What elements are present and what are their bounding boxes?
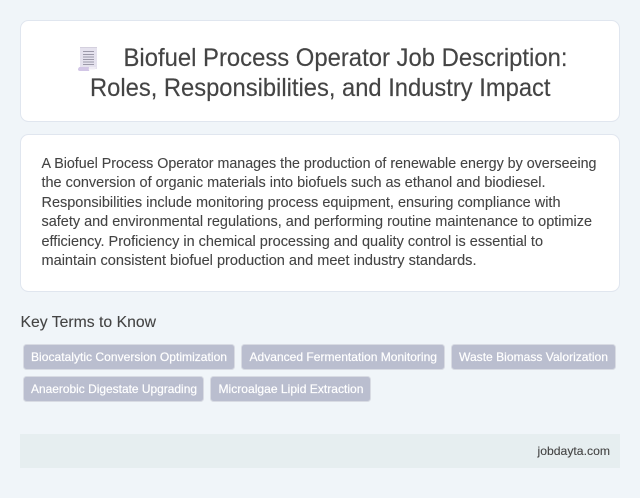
chip: waste biomass valorization [452,344,616,370]
icon: paper scroll [78,47,97,71]
chip: advanced fermentation monitoring: Advanced Fermentation Monitoring [250,350,437,364]
panel: description card [20,134,620,292]
footer: site name: jobdayta.com [536,444,610,458]
text block: description: Responsibilities include monitoring process equipment, ensuring compliance with [42,195,560,211]
text block: description: the conversion of organic materials into biofuels such as ethanol and biodiesel. [42,175,546,191]
text block: description [42,156,596,269]
chip: anaerobic digestate upgrading: Anaerobic Digestate Upgrading [31,382,197,396]
panel: title card [20,20,620,122]
heading: title: Biofuel Process Operator Job Description: [124,44,568,72]
footer bar [20,434,620,468]
chip: anaerobic digestate upgrading [24,376,204,402]
heading: key terms: Key Terms to Know [20,314,156,331]
heading: title: Roles, Responsibilities, and Industry Impact [90,74,551,102]
chip: biocatalytic conversion optimization: Biocatalytic Conversion Optimization [31,350,227,364]
chip: microalgae lipid extraction: Microalgae Lipid Extraction [218,382,364,396]
chip: microalgae lipid extraction [210,376,370,402]
chip: waste biomass valorization: Waste Biomass Valorization [459,350,608,364]
text block: description: A Biofuel Process Operator manages the production of renewable energy by overseeing [42,156,596,172]
text block: description: maintain consistent biofuel production and meet industry standards. [42,253,477,269]
chip: biocatalytic conversion optimization [24,344,234,370]
text block: description: efficiency. Proficiency in chemical processing and quality control is essential to [42,234,543,250]
text block: description: safety and environmental regulations, and performing routine maintenance to optimize [42,214,592,230]
heading: title [90,44,568,102]
key term chips [24,344,616,402]
chip: advanced fermentation monitoring [242,344,444,370]
